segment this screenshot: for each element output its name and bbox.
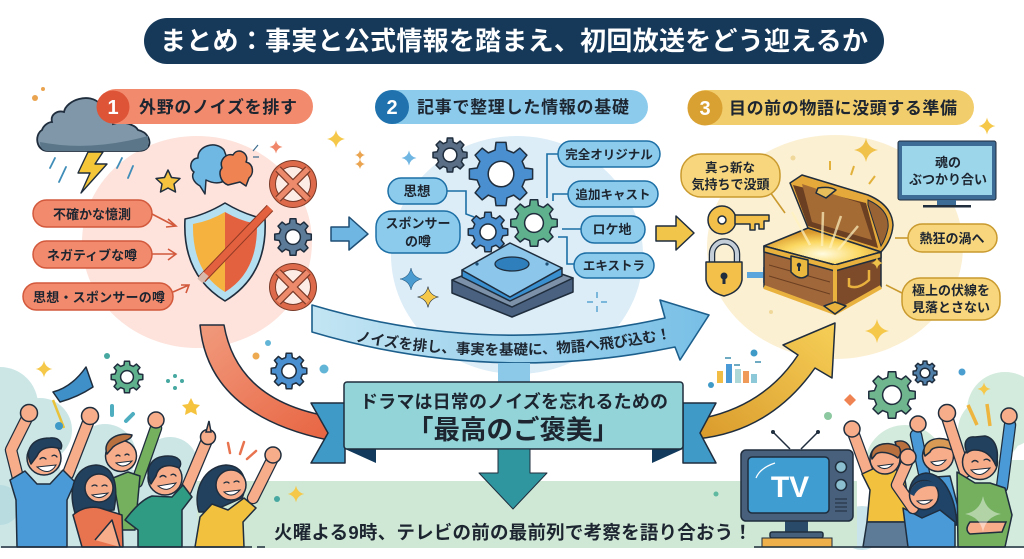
icon: star [156,170,180,192]
background circle: section 1 [82,136,312,348]
label: TV soul clash: 魂の [935,155,961,170]
arrow: section 2 to 3 [656,216,694,250]
fan: blue shirt man [10,404,98,547]
heading: section 3 [688,90,974,126]
icon: platform [452,243,573,317]
heading: section 2: 2 [386,97,398,119]
label: fresh feelings bubble: 気持ちで没頭 [691,177,770,192]
arrow: lock to chest [747,267,776,283]
icon: rumor speech bubbles [191,140,282,194]
heading: section 2 [375,90,648,124]
label: TV soul clash [898,141,996,208]
icon: cross mark bottom [269,263,317,311]
icon: padlock [706,242,742,296]
left ground line [1,546,265,548]
fan: yellow shirt woman with ponytail [844,421,912,547]
labels: article facts: の噂 [405,234,431,249]
crowd: left fans [10,404,281,547]
ribbon banner [311,382,716,463]
icon: gears cluster [433,138,557,252]
pale clouds behind left crowd [0,367,198,548]
fan: green shirt man behind [106,412,164,530]
big yellow curved arrow from ribbon to section 3 [696,323,835,439]
labels: article facts [376,141,660,278]
icon: flag [53,367,93,430]
heading: section 2: 記事で整理した情報の基礎 [417,98,629,117]
chart icon and dots [708,350,761,496]
right decorations [824,361,990,426]
label: foreshadowing: 極上の伏線を [912,283,990,298]
labels: article facts: 完全オリジナル [565,147,653,162]
heading: section 3: 3 [699,98,711,120]
crowd: right fans [844,404,1017,547]
icon: shield with slash [185,203,270,301]
icon: key [708,206,769,234]
big orange curved arrow into ribbon [200,325,340,440]
footer message: 火曜よる9時、テレビの前の最前列で考察を語り合おう！ [274,522,752,543]
label: frenzy [895,224,997,252]
heading: section 1: 外野のノイズを排す [139,97,297,117]
labels: noise sources [23,200,189,310]
labels: article facts: スポンサー [385,216,451,231]
icon: retro TV: TV [771,471,809,504]
pale clouds behind right crowd [840,372,1024,550]
label: foreshadowing [886,278,1000,320]
green footer band [197,481,857,548]
icon: cross mark top [269,160,317,208]
heading: section 3: 目の前の物語に没頭する準備 [729,98,957,118]
labels: noise sources: 思想・スポンサーの噂 [33,290,165,305]
arrow: down to footer [479,449,547,509]
labels: article facts: 思想 [404,183,431,199]
fan: blue sleeves man behind [910,416,960,515]
sparkles: section 2 [400,150,607,312]
label: foreshadowing: 見落とさない [912,300,990,315]
label: fresh feelings bubble: 真っ新な [705,160,755,175]
title bar [144,18,884,64]
icon: grey gear [275,219,311,255]
background circle: section 3 [707,135,963,359]
arrow: section 1 to 2 [331,217,368,250]
labels: article facts: ロケ地 [592,222,632,237]
heading: section 1: 1 [107,97,119,119]
fan: yellow shirt woman [195,447,281,547]
fan: green shirt man [938,404,1017,547]
curved banner arrow with message: ノイズを排し、事実を基礎に、物語へ飛び込む！ [357,328,666,356]
labels: noise sources: 不確かな憶測 [53,207,131,222]
sparkles: section 3 [769,118,996,343]
label: TV soul clash: ぶつかり合い [909,172,987,187]
labels: article facts: 追加キャスト [575,187,651,202]
fan: teal shirt man [125,421,216,547]
ribbon banner: 「最高のご褒美」 [407,415,619,445]
decorative dots and sparkles, top left [32,87,365,169]
connector bar to ribbon [498,363,530,385]
ribbon banner: ドラマは日常のノイズを忘れるための [360,391,668,412]
heading: section 1 [96,89,313,124]
icon: retro TV [741,430,853,547]
labels: noise sources: ネガティブな噂 [47,248,137,263]
title bar: まとめ：事実と公式情報を踏まえ、初回放送をどう迎えるか [160,26,868,56]
curved banner arrow with message [311,299,710,364]
background circle: section 2 [391,136,643,374]
fan: orange shirt woman [72,465,123,547]
left decorations [36,340,328,502]
label: fresh feelings bubble [681,154,785,213]
label: frenzy: 熱狂の渦へ [919,231,985,246]
fan: blue shirt woman front [897,449,957,547]
labels: article facts: エキストラ [583,259,645,273]
right ground line [754,546,1024,548]
icon: storm cloud [37,98,150,193]
icon: treasure chest [764,175,893,314]
